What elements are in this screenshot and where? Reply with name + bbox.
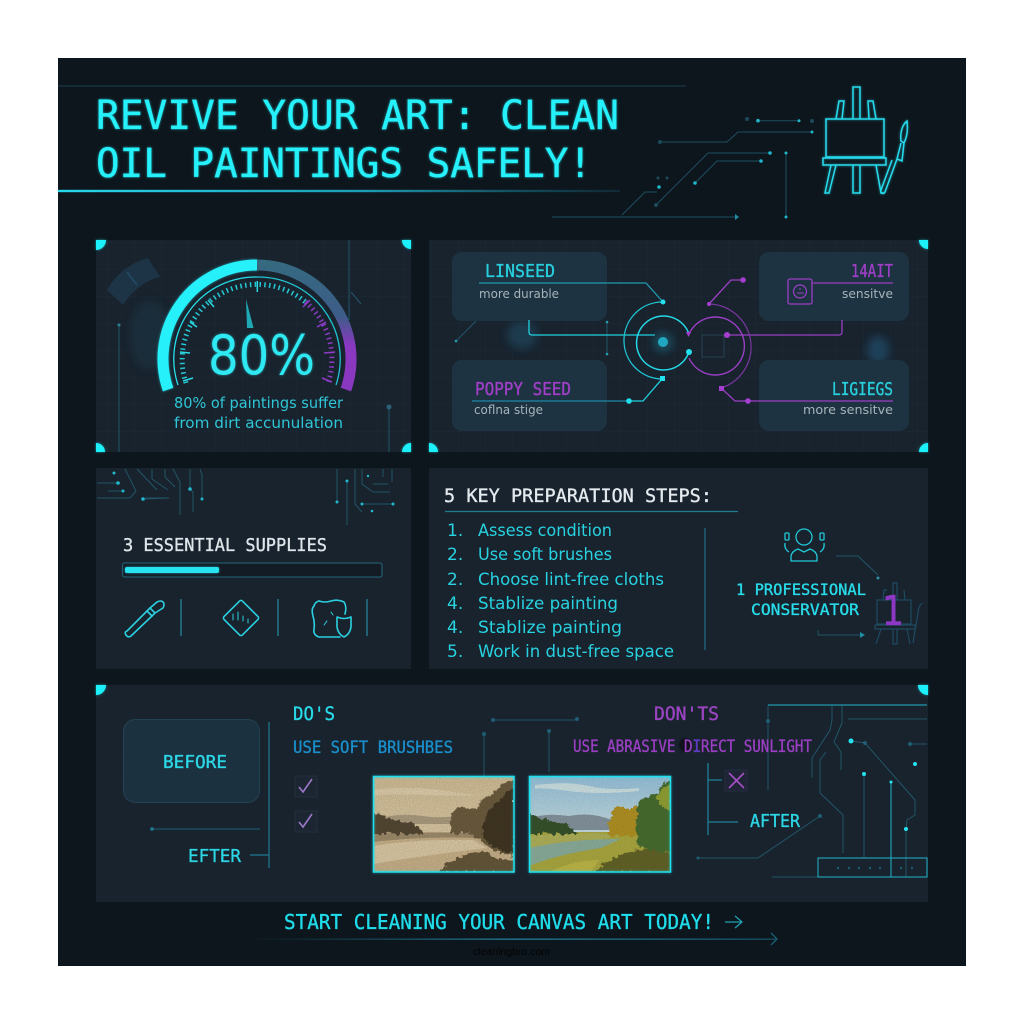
icon: cross — [725, 770, 747, 791]
do's text: USE SOFT BRUSHBES — [293, 738, 453, 757]
icon: sponge and shield — [312, 600, 351, 637]
gauge caption: from dirt accunulation — [174, 414, 343, 432]
panel: preparation steps — [429, 468, 928, 669]
icon: check one — [295, 776, 317, 797]
panel: essential supplies — [96, 468, 411, 669]
image: faded sepia landscape — [373, 776, 514, 872]
source credit: cleaningbro.com — [473, 946, 550, 958]
conservator label: CONSERVATOR — [751, 600, 859, 619]
card: poppy seed — [452, 360, 607, 431]
icon: cloth — [223, 600, 259, 636]
corner markers — [429, 240, 928, 452]
image: restored landscape — [529, 776, 671, 872]
card: linseed: LINSEED — [485, 261, 555, 282]
connector diagram — [472, 280, 893, 401]
efter label — [188, 846, 269, 867]
title: OIL PAINTINGS SAFELY! — [96, 141, 592, 187]
icon: brush — [125, 601, 164, 637]
heading: 3 ESSENTIAL SUPPLIES — [123, 535, 327, 556]
conservator label — [736, 580, 866, 619]
icon: faint easel with number — [875, 583, 922, 644]
steps list: 5. — [447, 642, 463, 662]
call to action: START CLEANING YOUR CANVAS ART TODAY! — [284, 910, 714, 934]
panel: before and after — [96, 685, 928, 902]
steps list: Choose lint-free cloths — [478, 570, 664, 590]
card: ligiegs — [759, 360, 909, 431]
card: linseed — [452, 252, 607, 321]
panel: oil comparison — [429, 240, 928, 452]
gauge needle — [246, 299, 254, 328]
progress bar — [122, 563, 382, 577]
corner markers — [96, 240, 411, 452]
title — [96, 93, 619, 187]
gauge dial — [163, 265, 351, 390]
steps list: 4. — [447, 594, 463, 614]
card: poppy seed: coflna stige — [474, 402, 543, 417]
before card — [124, 720, 260, 802]
steps list: Work in dust-free space — [478, 642, 674, 662]
efter label: EFTER — [188, 846, 241, 867]
card: 14AIT: sensitve — [842, 286, 893, 301]
do's heading: DO'S — [293, 703, 335, 725]
don'ts text: USE ABRASIVE DIRECT SUNLIGHT — [573, 737, 812, 756]
card: 14AIT — [759, 252, 909, 321]
steps list: Use soft brushes — [478, 545, 612, 565]
steps list: 2. — [447, 545, 463, 565]
card: poppy seed: POPPY SEED — [475, 379, 571, 400]
background — [58, 58, 966, 966]
gauge caption: 80% of paintings suffer — [174, 394, 344, 412]
after label: AFTER — [750, 811, 800, 832]
steps list: 4. — [447, 618, 463, 638]
gauge value: 80% — [208, 324, 315, 387]
before card: BEFORE — [163, 752, 227, 773]
header circuit decoration — [552, 117, 814, 220]
card: ligiegs: LIGIEGS — [832, 379, 893, 400]
icon: conservator — [785, 529, 824, 561]
icon: easel and brush — [823, 87, 907, 193]
steps list: Stablize painting — [478, 618, 622, 638]
conservator label: 1 PROFESSIONAL — [736, 580, 866, 599]
card: ligiegs: more sensitve — [803, 402, 893, 417]
connector nodes — [626, 277, 751, 404]
call to action — [247, 910, 777, 945]
circuit decoration — [482, 705, 927, 877]
steps list: Assess condition — [478, 521, 612, 541]
title: REVIVE YOUR ART: CLEAN — [96, 93, 619, 139]
corner markers — [96, 685, 928, 695]
steps list: Stablize painting — [478, 594, 618, 614]
icon: faint easel with number: 1 — [882, 587, 904, 635]
steps list: 1. — [447, 521, 463, 541]
gauge caption — [174, 394, 344, 432]
heading: 5 KEY PREPARATION STEPS: — [444, 485, 712, 507]
steps list: 2. — [447, 570, 463, 590]
card: 14AIT: 14AIT — [851, 261, 893, 282]
steps list — [447, 521, 674, 662]
don'ts heading: DON'TS — [654, 703, 719, 725]
card: linseed: more durable — [479, 286, 559, 301]
icon: check two — [295, 811, 317, 832]
panel: 80% gauge — [96, 240, 411, 452]
